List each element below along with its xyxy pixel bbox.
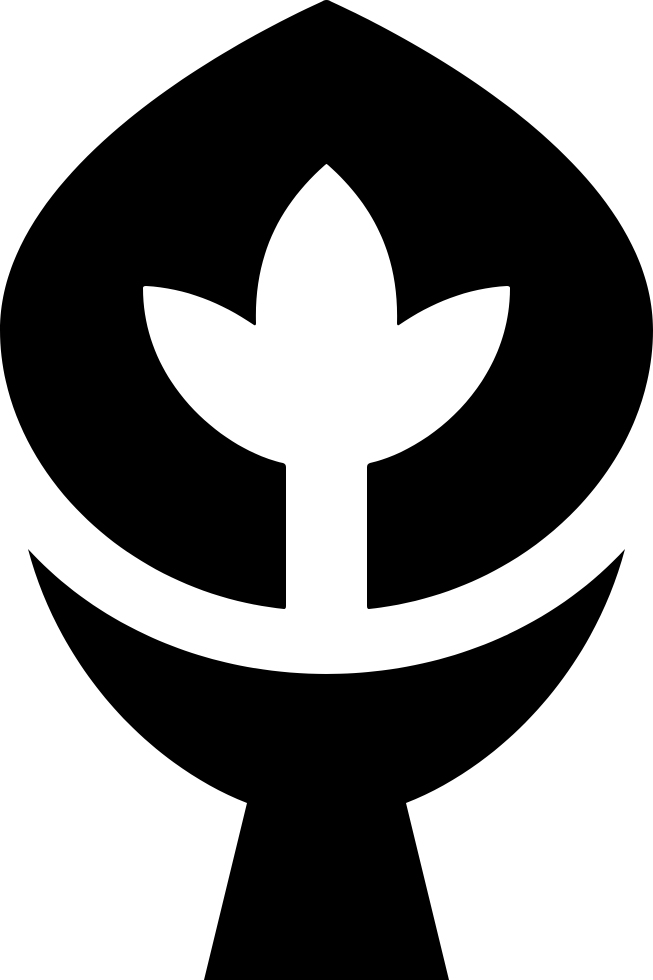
- leaf body with plant cutout: [0, 0, 653, 609]
- goblet cup and stem: [28, 549, 625, 980]
